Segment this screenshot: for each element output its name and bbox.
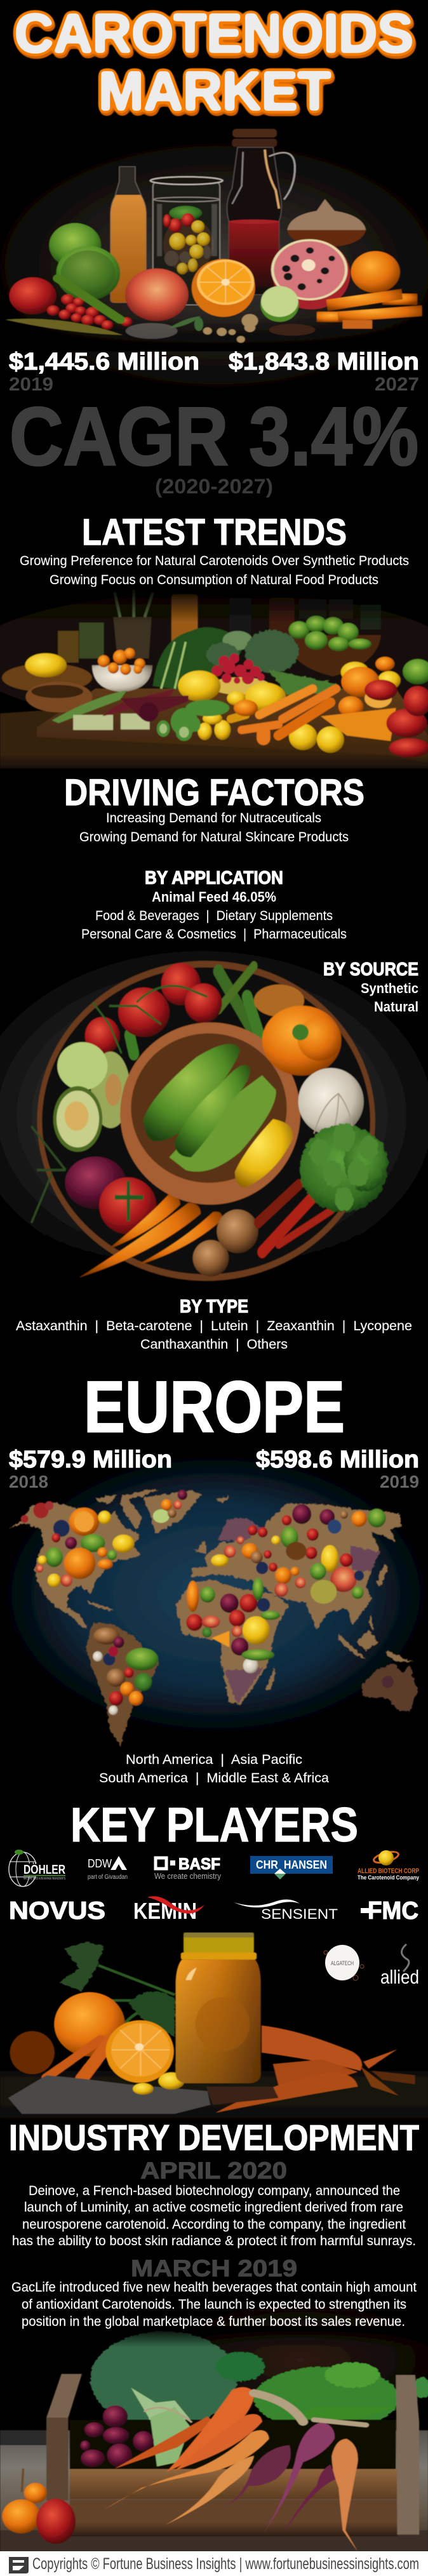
image: fruits, bottle, jar and jug still life [0,129,428,399]
logo: Novus: NOVUS [9,1897,105,1925]
logo: FMC: FMC [368,1897,418,1925]
market value 2027: $1,843.8 Million [229,349,419,375]
text: April 2020 development [12,2158,416,2248]
text: March 2019 development: of antioxidant Carotenoids. The launch is expected to strengthen its [22,2297,406,2312]
text: April 2020 development: APRIL 2020 [140,2158,287,2184]
segment: by application: Personal Care & Cosmetics | Pharmaceuticals [81,927,347,942]
garlic [298,1068,364,1135]
logo: Allied Biotech [358,1850,419,1881]
small yellow fruits [133,2072,185,2095]
white bowl of tomatoes [92,648,152,692]
title [15,3,413,122]
whole orange [351,251,400,293]
market value 2027: 2027 [375,374,419,395]
wooden board [206,2086,279,2105]
nuts, salt and leaves [126,314,316,343]
crate [46,2374,419,2536]
logo: Chr Hansen [250,1856,333,1879]
tomatoes and onion foreground [2,2469,76,2544]
logo: Kemin: KEMIN [133,1898,197,1924]
potatoes [193,1210,258,1276]
green bowl of limes [284,616,381,676]
text: March 2019 development: GacLife introduced five new health beverages that contain high amount [11,2280,417,2295]
berries [47,294,132,330]
text: other regions: North America | Asia Pacific [126,1752,302,1767]
logo: Sensient [234,1899,338,1922]
logo: BASF: BASF [178,1855,220,1873]
market value 2019: 2019 [9,374,53,395]
text: April 2020 development: launch of Luminity, an active cosmetic ingredient derived from rare [24,2200,403,2215]
icon: Fortune Business Insights logo [9,2557,29,2573]
lemons [178,662,401,753]
leafy tops [90,2332,428,2431]
text: April 2020 development: neurosporene carotenoid. According to the company, the ingredient [22,2217,406,2232]
bread bowl [287,199,366,247]
green apples [49,223,120,300]
continents [8,1488,418,1747]
segment: by type [16,1297,412,1352]
segment: by type: Astaxanthin | Beta-carotene | Lutein | Zeaxanthin | Lycopene [16,1319,412,1333]
tomatoes [85,963,222,1055]
text: driving factors list [79,811,349,844]
carrots [79,1194,222,1278]
logo: allied: allied [380,1966,419,1988]
segment: by application: Food & Beverages | Dietary Supplements [95,909,333,923]
segment: by application: Animal Feed 46.05% [152,889,276,905]
glass jug with red liquid [227,129,295,295]
market value 2027 [229,349,419,395]
text: April 2020 development: Deinove, a French-based biotechnology company, announced the [29,2184,400,2198]
glass jar with produce [150,177,222,305]
orange bell pepper [262,1006,342,1076]
segment: by source [323,959,418,1015]
logo: BASF [154,1855,221,1881]
australia seeds [382,1676,394,1688]
carrots right [216,2025,415,2112]
logo: Dohler: NATURAL FOOD & BEVERAGE INGREDIENTS [23,1877,65,1881]
lime and avocados [53,1042,130,1152]
logo: Allied Biotech: The Carotenoid Company [358,1874,419,1881]
europe value 2018: $579.9 Million [9,1446,172,1473]
logos: key players [9,1850,419,1925]
logo: DDW: part of Givaudan [88,1874,128,1881]
text: March 2019 development [11,2255,417,2329]
text: driving factors list: Growing Demand for Natural Skincare Products [79,830,349,844]
crate back [70,2420,396,2471]
leafy greens [153,627,253,691]
text: March 2019 development: MARCH 2019 [131,2255,297,2281]
europe and asia produce [211,1504,386,1604]
zucchinis and yellow pepper [144,1044,293,1187]
text: April 2020 development: has the ability to boost skin radiance & protect it from harmful sunrays. [12,2234,416,2248]
greens behind [130,966,259,1053]
citrus and apples on the right [234,657,428,757]
bottle of orange juice [110,166,146,303]
orange carrot right [331,2439,358,2551]
title: MARKET [98,61,331,122]
logo: Dohler [9,1850,66,1886]
text: trends list: Growing Focus on Consumption of Natural Food Products [50,573,378,587]
text: driving factors list: Increasing Demand for Nutraceuticals [106,811,321,825]
CAGR: (2020-2027) [155,475,273,498]
outer plate ring [39,964,373,1278]
europe value 2019: 2019 [380,1472,419,1492]
logo: Sensient: SENSIENT [261,1906,338,1922]
carrots left [46,2039,112,2079]
europe value 2019: $598.6 Million [256,1446,419,1473]
heading: key players: KEY PLAYERS [70,1798,358,1852]
logo: DDW [88,1856,128,1881]
logo: Algatech: ALGATECH [331,1960,354,1967]
red tomato [99,1177,156,1234]
segment: by application [81,868,347,942]
europe value 2018: 2018 [9,1472,48,1492]
heading: driving factors: DRIVING FACTORS [64,772,364,813]
segment: by source: Synthetic [361,980,418,996]
beets [80,2405,154,2467]
logo: Algatech [324,1945,364,1980]
greenland produce [153,1490,187,1523]
carrots [104,2387,269,2525]
footer [0,2551,428,2576]
text: other regions [99,1752,329,1785]
title: CAROTENOIDS [15,3,413,64]
image: food on a wooden table [0,587,428,780]
segment: by application: BY APPLICATION [145,868,283,888]
heading: latest trends: LATEST TRENDS [82,512,347,553]
orange half [105,2020,174,2083]
lime half [260,286,298,322]
chillies [258,1185,331,1252]
whole oranges [10,1992,125,2074]
market value 2019: $1,445.6 Million [9,349,199,375]
segment: by type: BY TYPE [180,1297,248,1317]
cucumber [58,278,120,319]
europe value 2019 [256,1446,419,1492]
image: vegetable plate [0,940,428,1290]
background jars [58,590,381,662]
onion top right [254,985,304,1017]
text: trends list: Growing Preference for Natural Carotenoids Over Synthetic Products [20,554,409,568]
image: carotenoid juice jar with carrots and oranges [0,1932,428,2125]
red apple [10,277,57,314]
cloth [8,2075,210,2114]
central bowl [120,1022,300,1205]
logo: Dohler: DÖHLER [23,1862,65,1877]
text: trends list [20,554,409,587]
south america produce [93,1627,158,1715]
text: March 2019 development: position in the global marketplace & further boost its sales revenue. [22,2314,405,2329]
carrots [231,689,336,738]
image: crate of carrots and beets [0,2296,428,2551]
heading: europe: EUROPE [84,1367,345,1448]
twine [145,2393,366,2425]
logo: DDW: DDW [88,1857,112,1870]
text: other regions: South America | Middle East & Africa [99,1771,329,1785]
sliced vegetables [52,689,229,741]
big apple [125,269,189,321]
wooden bowls and lemon [2,653,92,712]
broccoli [206,630,342,697]
logo: allied [380,1944,419,1988]
broccoli [300,1123,388,1212]
africa produce [186,1578,280,1674]
stem bundle [131,2388,194,2466]
europe value 2018 [9,1446,172,1492]
logo: Chr Hansen: CHR HANSEN [256,1859,327,1871]
segment: by source: Natural [374,999,418,1015]
red onion [31,1126,126,1223]
raspberries [210,653,271,695]
logo: BASF: We create chemistry [154,1871,221,1881]
market value 2019 [9,349,199,395]
watermelon slice [271,239,350,309]
segment: by type: Canthaxanthin | Others [140,1337,288,1352]
orange half [192,259,255,317]
purple radishes [218,2422,336,2543]
stem bundle front [150,2407,190,2466]
herb sprig [58,1942,175,2037]
image: world map made of food [0,1452,428,1747]
banana [6,319,123,335]
glass jar [175,1932,261,2083]
north america produce [21,1501,135,1587]
carrot sticks [317,289,422,329]
